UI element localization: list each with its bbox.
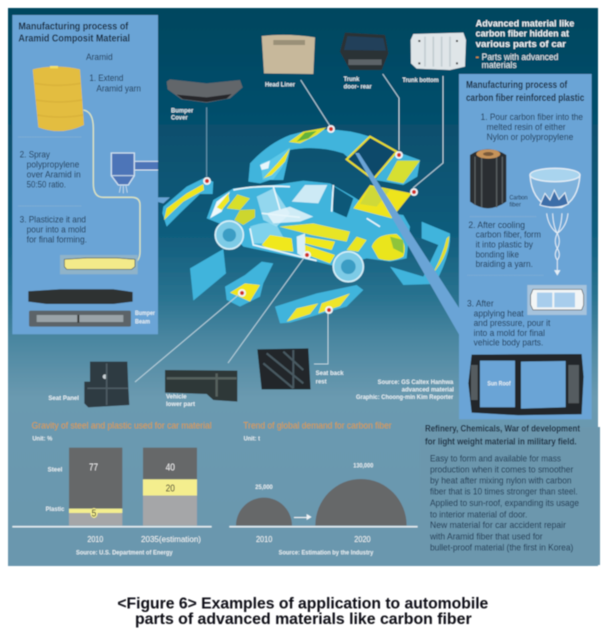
label: bumper cover: Bumper <box>171 107 194 114</box>
axis labels <box>256 534 371 544</box>
main title: advanced material: various parts of car <box>476 39 566 49</box>
axis labels: 2010 <box>256 534 273 544</box>
wheels <box>215 221 363 282</box>
label: trunk door rear: Trunk <box>344 76 360 83</box>
figure caption <box>117 595 489 628</box>
body text: Easy to form and available for mass <box>430 454 561 464</box>
legend: parts with advanced materials <box>476 52 558 70</box>
heading: carbon fiber process: carbon fiber reinforced plastic <box>466 93 585 104</box>
series labels: Steel <box>48 468 63 474</box>
series labels <box>46 468 65 513</box>
body text: Applied to sun-roof, expanding its usage <box>430 498 579 508</box>
bar 2035 <box>143 448 197 526</box>
heading: aramid process: Aramid Composit Material <box>18 33 130 44</box>
body text: with Aramid fiber that used for <box>429 531 543 541</box>
step 2 text: 50:50 ratio. <box>27 180 66 190</box>
step 3 text: 3. Plasticize it and <box>20 215 86 225</box>
step 2 text: it into plastic by <box>476 240 533 250</box>
unit: Unit: % <box>32 437 53 443</box>
label: carbon fiber: Carbon <box>509 194 528 201</box>
top parts <box>262 33 466 91</box>
photo: bumper cover <box>167 79 243 103</box>
step 1 text: 1. Extend <box>89 73 123 83</box>
main title: advanced material <box>476 19 574 70</box>
step 2 text: over Aramid in <box>27 170 81 180</box>
semicircle 2010 <box>236 498 292 526</box>
source credit: Source: GS Caltex Hanhwa <box>378 379 454 386</box>
label: vehicle lower part: Vehicle <box>166 393 187 400</box>
panel: carbon fiber reinforced plastic <box>459 74 592 419</box>
label: trunk door rear: door- rear <box>344 84 372 91</box>
icon: mold <box>60 255 138 274</box>
step 3 text: into a mold for final <box>474 328 545 338</box>
icon: aramid yarn cone <box>33 66 84 131</box>
bottom right background block <box>420 427 600 565</box>
legend: parts with advanced materials: materials <box>482 60 517 70</box>
step 2 text: 2. Spray <box>20 150 50 160</box>
step 2 text <box>20 150 81 190</box>
car body <box>207 181 412 267</box>
axis labels: 2035(estimation) <box>141 534 201 544</box>
step 1 text: Nylon or polypropylene <box>487 132 573 142</box>
panel: aramid composite manufacturing <box>12 15 158 334</box>
values <box>89 463 175 520</box>
bumper cover part <box>158 79 243 227</box>
axis labels <box>87 534 201 544</box>
chart title: Gravity of steel and plastic used for car material <box>32 421 212 431</box>
values: 130,000 <box>353 464 374 470</box>
unit: Unit: t <box>244 437 260 443</box>
label: trunk door rear <box>344 76 372 91</box>
values: 20 <box>166 484 175 495</box>
heading: for light weight material in military field. <box>425 436 577 446</box>
seat back piece <box>275 285 363 323</box>
icon: roof thumbnail <box>527 285 587 315</box>
label: aramid: Aramid <box>86 52 113 62</box>
heading: aramid process <box>18 21 130 44</box>
label: vehicle lower part <box>166 393 196 408</box>
source credit: Graphic: Choong-min Kim Reporter <box>356 394 454 401</box>
door piece <box>190 249 226 301</box>
label: trunk bottom: Trunk bottom <box>402 77 439 84</box>
heading <box>425 424 580 446</box>
source credit <box>356 379 454 401</box>
main title: advanced material: Advanced material like <box>476 19 574 29</box>
series labels: Plastic <box>46 507 65 513</box>
source: Source: Estimation by the Industry <box>279 550 374 556</box>
label: carbon fiber: fiber <box>509 202 521 209</box>
axis labels: 2020 <box>354 534 371 544</box>
step 3 text: applying heat <box>474 308 524 318</box>
photo: seat panel <box>84 362 129 407</box>
body text: bullet-proof material (the first in Korea) <box>430 542 573 552</box>
photo: head liner <box>262 35 315 74</box>
yarn line <box>83 110 140 263</box>
icon: fiber braid <box>547 213 568 275</box>
label: bumper cover <box>171 107 194 121</box>
figure caption: parts of advanced materials like carbon fiber <box>135 611 472 628</box>
values: 5 <box>92 509 96 520</box>
fender piece <box>158 178 213 227</box>
body text <box>429 454 579 552</box>
markers: advanced material locations <box>204 126 417 313</box>
text block: refinery and chemicals <box>425 424 580 552</box>
body text: production when it comes to smoother <box>430 465 573 475</box>
heading: carbon fiber process: Manufacturing process of <box>466 80 568 91</box>
icon: carbon fiber spool <box>470 149 506 208</box>
body text: by heat after mixing nylon with carbon <box>430 476 572 486</box>
label: seat back rest <box>316 370 344 385</box>
car illustration with parts <box>190 127 450 323</box>
step 3 text: for final forming. <box>27 234 87 244</box>
step 1 text <box>481 112 583 142</box>
label: vehicle lower part: lower part <box>166 401 196 408</box>
leader lines <box>135 74 443 382</box>
photo: seat back rest <box>257 348 311 389</box>
label: bumper cover: Cover <box>171 114 188 121</box>
semicircle 2020 <box>315 479 407 526</box>
source credit: advanced material <box>402 387 454 394</box>
body text: to interior material of door. <box>430 509 527 519</box>
step 2 text: carbon fiber, form <box>476 230 541 240</box>
exploded roof and rear shell <box>248 127 420 185</box>
step 2 text: polypropylene <box>27 160 79 170</box>
bar 2010 <box>69 448 122 526</box>
arrow <box>294 514 312 520</box>
step 1 text: Aramid yarn <box>96 83 141 93</box>
label: seat back rest: rest <box>316 378 327 385</box>
icon: melting bowl with flame <box>530 168 580 207</box>
legend: parts with advanced materials: Parts with advanced <box>482 52 558 62</box>
heading: Refinery, Chemicals, War of development <box>425 424 580 434</box>
icon: spray hopper <box>111 153 158 193</box>
label: bumper beam: Beam <box>135 318 150 325</box>
photo: vehicle lower part <box>165 370 237 402</box>
photo: sun roof frame <box>468 354 584 415</box>
photo: trunk door <box>340 33 388 70</box>
label: head liner: Head Liner <box>265 82 295 89</box>
step 3 text: pour into a mold <box>27 224 86 234</box>
rear bumper piece <box>390 222 450 285</box>
photo: trunk bottom <box>411 33 466 70</box>
step 3 text <box>20 215 87 244</box>
values: 40 <box>166 463 175 474</box>
step 2 text: bonding like <box>476 249 519 259</box>
figure caption: <Figure 6> Examples of application to automobile <box>117 595 489 612</box>
blue beam linking car to carbon fiber panel <box>355 153 461 338</box>
step 2 text <box>468 220 541 269</box>
source: Source: U.S. Department of Energy <box>76 550 173 556</box>
chart title: Trend of global demand for carbon fiber <box>243 421 392 431</box>
label: seat panel: Seat Panel <box>48 395 79 402</box>
label: sun roof: Sun Roof <box>487 381 511 388</box>
seat piece <box>225 262 273 307</box>
step 3 text <box>467 299 551 348</box>
step 3 text: and pressure, pour it <box>474 318 551 328</box>
main title: advanced material: carbon fiber hidden at <box>476 29 569 39</box>
step 2 text: braiding a yarn. <box>476 259 533 269</box>
axis labels: 2010 <box>87 534 104 544</box>
lower parts <box>48 348 344 408</box>
step 1 text: 1. Pour carbon fiber into the <box>481 112 583 122</box>
label: bumper beam: Bumper <box>135 310 155 317</box>
body text: fiber that is 10 times stronger than steel. <box>430 487 578 497</box>
step 1 text: melted resin of either <box>487 122 566 132</box>
step 3 text: vehicle body parts. <box>474 338 543 348</box>
label: seat back rest: Seat back <box>316 370 344 377</box>
body text: New material for car accident repair <box>430 520 566 530</box>
bar chart: steel and plastic <box>12 421 212 556</box>
values: 25,000 <box>255 485 273 491</box>
chart: global carbon fiber demand <box>229 421 418 556</box>
values <box>255 464 374 491</box>
label: bumper beam <box>135 310 155 325</box>
label: carbon fiber <box>509 194 528 209</box>
step 1 text <box>89 73 141 93</box>
step 2 text: 2. After cooling <box>468 220 525 230</box>
step 3 text: 3. After <box>467 299 494 309</box>
heading: aramid process: Manufacturing process of <box>18 21 129 32</box>
photo: bumper beam <box>28 289 133 327</box>
values: 77 <box>89 463 98 474</box>
heading: carbon fiber process <box>466 80 585 104</box>
